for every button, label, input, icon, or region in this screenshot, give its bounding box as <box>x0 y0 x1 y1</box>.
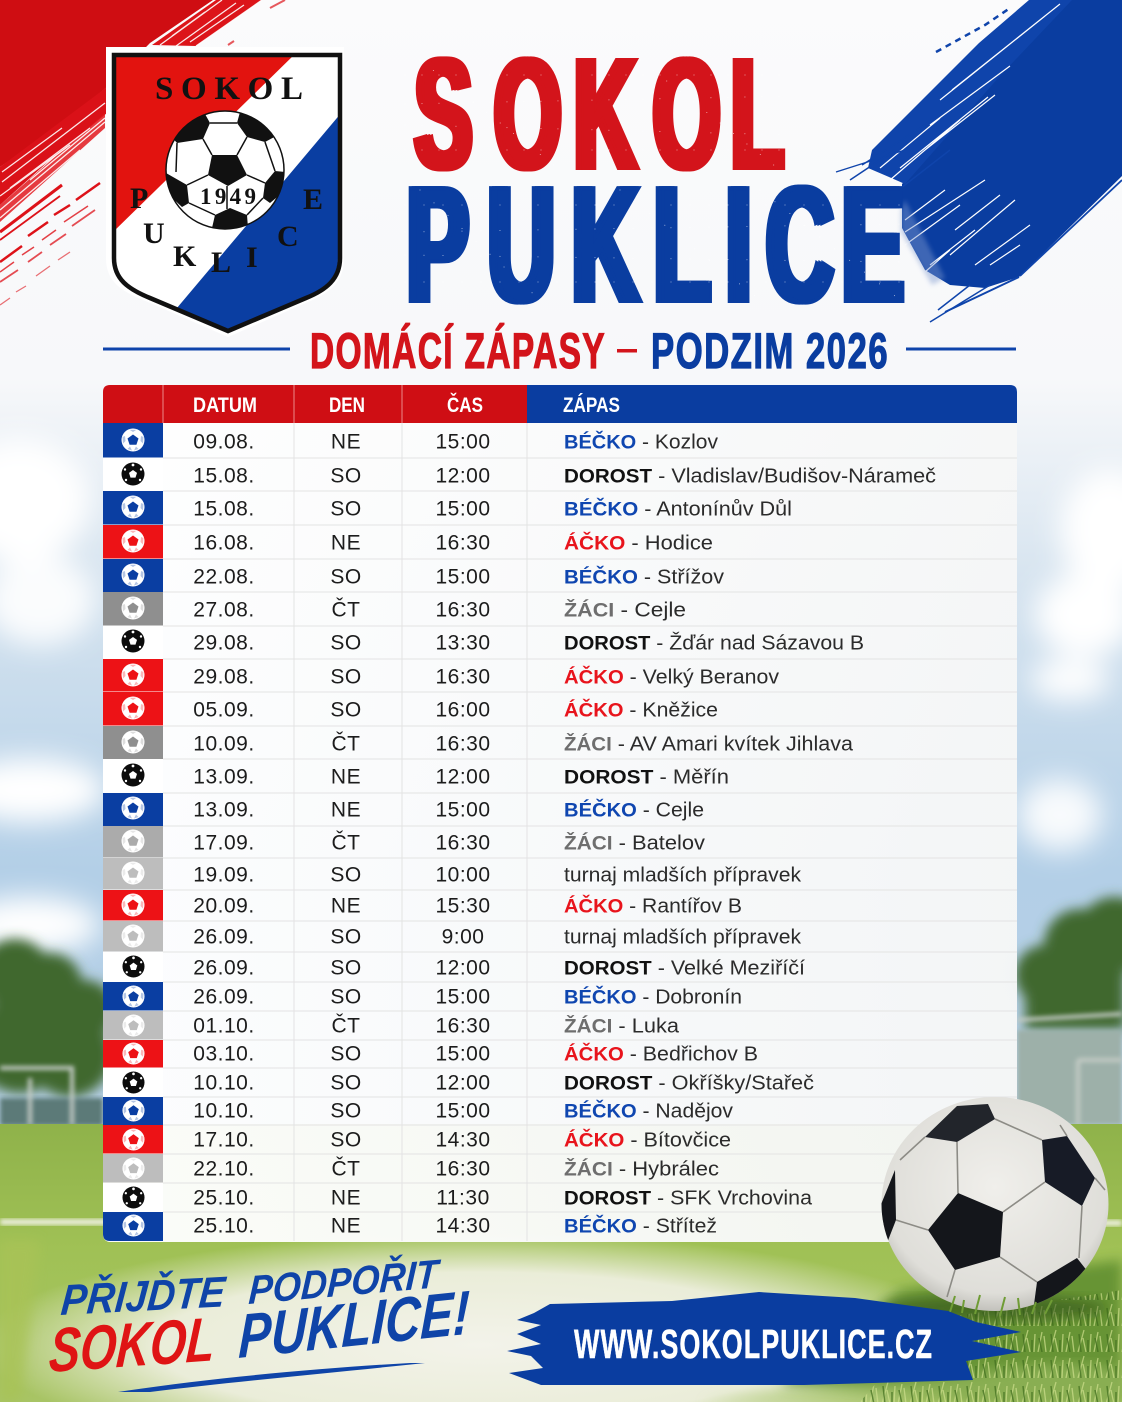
row 1: NE <box>331 430 361 453</box>
row 7: 29.08. <box>193 631 255 654</box>
row 16: turnaj mladších přípravek <box>564 925 802 948</box>
row 21: 10.10. <box>193 1071 255 1094</box>
row 10: ČT <box>332 732 360 755</box>
subtitle: domácí zápasy podzim 2026 <box>103 323 1016 379</box>
row 25: NE <box>331 1186 361 1209</box>
row 22: 15:00 <box>435 1099 491 1122</box>
row 26: 14:30 <box>435 1214 491 1237</box>
row 2 <box>103 458 936 491</box>
row 15 <box>103 890 742 920</box>
row 5: 22.08. <box>193 565 255 588</box>
row 7: DOROST - Žďár nad Sázavou B <box>564 631 864 654</box>
row 22 <box>103 1097 734 1125</box>
logo lettering: U <box>143 217 165 250</box>
row 24: 22.10. <box>193 1157 255 1180</box>
row 21: DOROST - Okříšky/Stařeč <box>564 1071 814 1094</box>
row 15: 15:30 <box>435 894 491 917</box>
row 20: 15:00 <box>435 1042 491 1065</box>
row 26 <box>103 1212 717 1241</box>
row 2: DOROST - Vladislav/Budišov-Nárameč <box>564 464 936 487</box>
table header: ČAS <box>447 393 483 417</box>
row 12: 13.09. <box>193 798 255 821</box>
row 3 <box>103 491 792 524</box>
football photo <box>880 1097 1108 1320</box>
logo lettering: P <box>130 182 148 215</box>
row 18: BÉČKO - Dobronín <box>564 984 742 1008</box>
row 4: ÁČKO - Hodice <box>564 530 713 554</box>
row 10: 10.09. <box>193 732 255 755</box>
row 9 <box>103 692 718 726</box>
row 20 <box>103 1040 758 1068</box>
title: Puklice: PUKLICE <box>407 154 904 337</box>
table header: ZÁPAS <box>563 394 620 417</box>
row 14: 10:00 <box>435 863 491 886</box>
slogan: přijďte podpořit Sokol Puklice: PUKLICE! <box>238 1279 471 1372</box>
row 13: 16:30 <box>435 831 491 854</box>
row 17: DOROST - Velké Meziříčí <box>564 956 805 979</box>
row 18: 15:00 <box>435 985 491 1008</box>
row 3: 15:00 <box>435 497 491 520</box>
row 11: 12:00 <box>435 765 491 788</box>
logo lettering: E <box>303 183 323 216</box>
row 10: 16:30 <box>435 732 491 755</box>
row 12: BÉČKO - Cejle <box>564 797 704 821</box>
row 6 <box>103 592 686 626</box>
table header <box>103 385 1017 423</box>
row 2: SO <box>330 464 362 487</box>
row 2: 15.08. <box>193 464 255 487</box>
row 2: 12:00 <box>435 464 491 487</box>
row 5: 15:00 <box>435 565 491 588</box>
row 24: 16:30 <box>435 1157 491 1180</box>
row 14: 19.09. <box>193 863 255 886</box>
row 8: ÁČKO - Velký Beranov <box>564 664 780 688</box>
row 12: NE <box>331 798 361 821</box>
row 11: NE <box>331 765 361 788</box>
logo lettering: K <box>173 240 197 273</box>
background: blurred trees and goals <box>0 897 1122 1126</box>
row 16: SO <box>330 925 362 948</box>
row 21: SO <box>330 1071 362 1094</box>
row 6: 27.08. <box>193 598 255 621</box>
title: Sokol: SOKOL <box>415 25 784 201</box>
row 19: 01.10. <box>193 1014 255 1037</box>
row 26: BÉČKO - Střítež <box>564 1213 717 1237</box>
row 22: BÉČKO - Nadějov <box>564 1098 734 1122</box>
row 9: ÁČKO - Kněžice <box>564 697 718 721</box>
row 3: 15.08. <box>193 497 255 520</box>
slogan: přijďte podpořit Sokol Puklice: PŘIJĎTE <box>59 1267 228 1325</box>
row 10 <box>103 726 854 759</box>
row 9: SO <box>330 698 362 721</box>
subtitle: domácí zápasy podzim 2026: PODZIM 2026 <box>651 323 889 379</box>
row 24: ŽÁCI - Hybrálec <box>564 1156 719 1180</box>
row 17: 26.09. <box>193 956 255 979</box>
logo: Sokol Puklice shield <box>106 47 345 340</box>
row 13: 17.09. <box>193 831 255 854</box>
row 3: BÉČKO - Antonínův Důl <box>564 496 792 520</box>
logo year: 1949 <box>200 184 256 209</box>
slogan: přijďte podpořit Sokol Puklice <box>47 1250 471 1392</box>
logo lettering: SOKOL <box>155 71 303 107</box>
row 15: ÁČKO - Rantířov B <box>564 893 742 917</box>
slogan: přijďte podpořit Sokol Puklice: PODPOŘIT <box>248 1250 442 1313</box>
row 17 <box>103 952 805 982</box>
row 13: ČT <box>332 831 360 854</box>
row 7: 13:30 <box>435 631 491 654</box>
table header: DEN <box>329 394 365 417</box>
row 19: 16:30 <box>435 1014 491 1037</box>
row 11 <box>103 759 729 792</box>
row 12: 15:00 <box>435 798 491 821</box>
row 12 <box>103 793 704 826</box>
row 19 <box>103 1011 680 1040</box>
row 23: 14:30 <box>435 1128 491 1151</box>
row 25: DOROST - SFK Vrchovina <box>564 1186 813 1209</box>
row 20: ÁČKO - Bedřichov B <box>564 1041 758 1065</box>
logo lettering: L <box>211 246 231 279</box>
row 6: ŽÁCI - Cejle <box>564 597 686 621</box>
row 19: ČT <box>332 1014 360 1037</box>
subtitle: domácí zápasy podzim 2026: DOMÁCÍ ZÁPASY <box>310 323 606 379</box>
row 14: SO <box>330 863 362 886</box>
row 13 <box>103 826 706 858</box>
row 4: NE <box>331 531 361 554</box>
row 7 <box>103 626 864 659</box>
website brush banner <box>507 1292 1021 1385</box>
row 9: 05.09. <box>193 698 255 721</box>
row 13: ŽÁCI - Batelov <box>564 830 706 854</box>
row 21: 12:00 <box>435 1071 491 1094</box>
row 7: SO <box>330 631 362 654</box>
row 5 <box>103 559 725 592</box>
row 17: 12:00 <box>435 956 491 979</box>
website brush banner: WWW.SOKOLPUKLICE.CZ <box>574 1321 933 1367</box>
row 8 <box>103 659 780 692</box>
row 16: 26.09. <box>193 925 255 948</box>
row 11: 13.09. <box>193 765 255 788</box>
logo lettering: I <box>246 241 258 274</box>
row 4: 16:30 <box>435 531 491 554</box>
row 22: 10.10. <box>193 1099 255 1122</box>
row 20: 03.10. <box>193 1042 255 1065</box>
slogan: přijďte podpořit Sokol Puklice: SOKOL <box>47 1305 217 1386</box>
table header: DATUM <box>193 394 257 417</box>
row 5: BÉČKO - Střížov <box>564 564 725 588</box>
row 1: 09.08. <box>193 430 255 453</box>
row 23 <box>103 1125 731 1154</box>
row 14: turnaj mladších přípravek <box>564 863 802 886</box>
row 16: 9:00 <box>442 925 484 948</box>
row 20: SO <box>330 1042 362 1065</box>
row 23: ÁČKO - Bítovčice <box>564 1127 731 1151</box>
row 26: NE <box>331 1214 361 1237</box>
row 15: NE <box>331 894 361 917</box>
row 10: ŽÁCI - AV Amari kvítek Jihlava <box>564 731 854 755</box>
row 25: 25.10. <box>193 1186 255 1209</box>
brush stroke: blue top right <box>836 0 1122 322</box>
row 25: 11:30 <box>436 1186 490 1209</box>
row 6: ČT <box>332 598 360 621</box>
logo lettering <box>130 71 323 279</box>
row 23: SO <box>330 1128 362 1151</box>
row 18: SO <box>330 985 362 1008</box>
row 24 <box>103 1154 719 1182</box>
row 14 <box>103 858 802 890</box>
row 8: SO <box>330 665 362 688</box>
fixtures table <box>103 385 1017 1242</box>
row 1 <box>103 423 719 458</box>
background: grass pitch <box>0 1124 1122 1402</box>
row 5: SO <box>330 565 362 588</box>
row 21 <box>103 1068 814 1097</box>
row 17: SO <box>330 956 362 979</box>
row 16 <box>103 921 802 952</box>
row 18 <box>103 982 742 1010</box>
row 23: 17.10. <box>193 1128 255 1151</box>
logo ball <box>166 111 286 232</box>
row 3: SO <box>330 497 362 520</box>
row 9: 16:00 <box>435 698 491 721</box>
row 1: BÉČKO - Kozlov <box>564 429 719 453</box>
row 8: 16:30 <box>435 665 491 688</box>
row 1: 15:00 <box>435 430 491 453</box>
row 22: SO <box>330 1099 362 1122</box>
row 4 <box>103 525 713 558</box>
row 6: 16:30 <box>435 598 491 621</box>
row 19: ŽÁCI - Luka <box>564 1013 680 1037</box>
logo lettering: C <box>277 220 299 253</box>
brush stroke: red top left <box>0 0 285 305</box>
row 25 <box>103 1183 813 1212</box>
row 26: 25.10. <box>193 1214 255 1237</box>
row 11: DOROST - Měřín <box>564 765 729 788</box>
row 24: ČT <box>332 1157 360 1180</box>
row 8: 29.08. <box>193 665 255 688</box>
row 18: 26.09. <box>193 985 255 1008</box>
row 4: 16.08. <box>193 531 255 554</box>
row 15: 20.09. <box>193 894 255 917</box>
